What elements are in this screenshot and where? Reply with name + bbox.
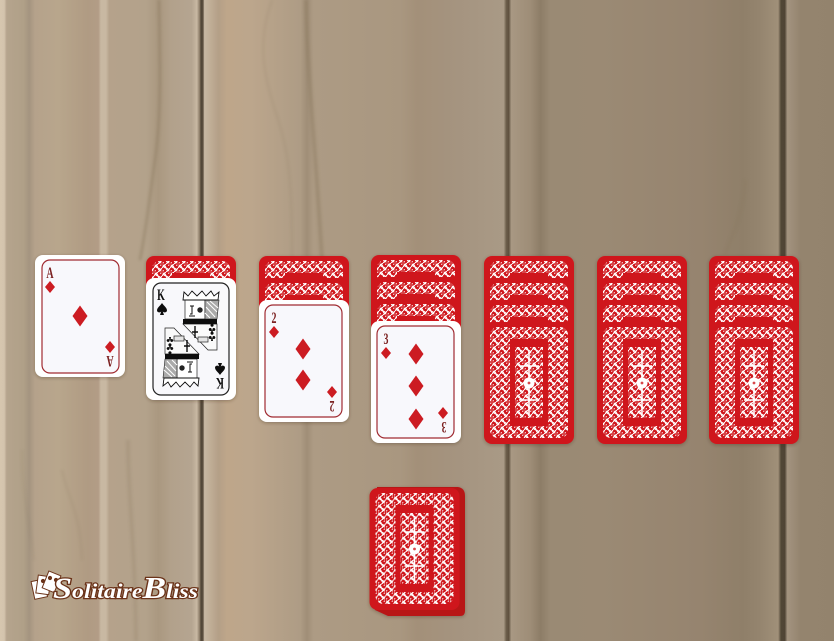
logo: Solitaire Bliss <box>31 570 198 605</box>
tableau column 3: two of diamonds on two face-down cards: 2 <box>329 397 334 415</box>
tableau column 4: three of diamonds on three face-down cards: 3 <box>384 330 389 348</box>
tableau column 2: king of spades on one face-down card: K <box>157 286 165 304</box>
tableau column 1: ace of diamonds: A <box>46 264 54 282</box>
tableau column 1: ace of diamonds: A <box>106 352 114 370</box>
stock pile <box>370 487 465 616</box>
tableau column 1: ace of diamonds <box>35 255 125 377</box>
tableau column 2: king of spades on one face-down card <box>146 256 236 400</box>
tableau column 5: face-down stack <box>484 256 574 444</box>
tableau column 4: three of diamonds on three face-down cards: 3 <box>441 418 446 436</box>
tableau column 7: face-down stack <box>709 256 799 444</box>
tableau column 6: face-down stack <box>597 256 687 444</box>
logo wordmark: Solitaire Bliss <box>53 570 198 605</box>
icon: fan of cards <box>31 571 61 599</box>
tableau column 4: three of diamonds on three face-down cards <box>371 255 461 443</box>
tableau column 2: king of spades on one face-down card: K <box>216 374 224 392</box>
tableau column 3: two of diamonds on two face-down cards: 2 <box>272 309 277 327</box>
tableau column 3: two of diamonds on two face-down cards <box>259 256 349 422</box>
